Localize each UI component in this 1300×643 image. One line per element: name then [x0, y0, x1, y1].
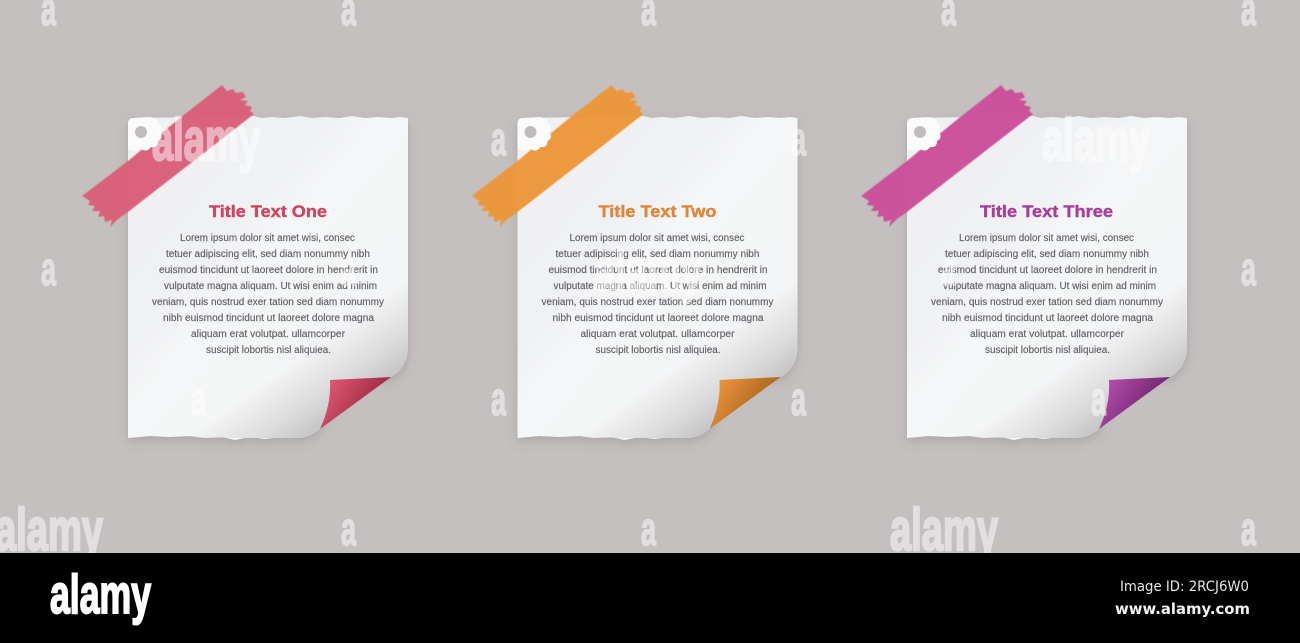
body text three: Lorem ipsum dolor sit amet wisi, consec — [959, 233, 1134, 244]
body text three: tetuer adipiscing elit, sed diam nonummy nibh — [945, 249, 1149, 260]
punched corner three — [907, 117, 941, 151]
page fold two — [710, 377, 780, 429]
page fold one — [320, 377, 391, 429]
body text two: suscipit lobortis nisl aliquiea. — [596, 345, 720, 356]
website: www.alamy.com — [1115, 600, 1250, 618]
tape two — [472, 85, 644, 227]
paper sheet three — [907, 116, 1187, 440]
body text three: euismod tincidunt ut laoreet dolore in hendrerit in — [938, 265, 1157, 276]
watermarks: alamy — [152, 107, 260, 173]
body text one: nibh euismod tincidunt ut laoreet dolore magna — [163, 313, 374, 324]
watermarks: a — [941, 242, 956, 295]
body text two: tetuer adipiscing elit, sed diam nonummy nibh — [556, 249, 760, 260]
body text three: veniam, quis nostrud exer tation sed diam nonummy — [931, 297, 1163, 308]
body text three — [931, 233, 1163, 356]
body text one: aliquam erat volutpat. ullamcorper — [191, 329, 346, 340]
paper sheet one — [128, 116, 408, 440]
paper sheet two — [518, 116, 798, 440]
watermarks: a — [1241, 242, 1256, 295]
body text one: suscipit lobortis nisl aliquiea. — [206, 345, 331, 356]
page curl shading three — [907, 118, 1187, 438]
watermarks: alamy — [890, 497, 998, 563]
body text two: vulputate magna aliquam. Ut wisi enim ad minim — [554, 281, 766, 292]
body text two: aliquam erat volutpat. ullamcorper — [580, 329, 735, 340]
watermarks: a — [341, 502, 356, 555]
tape one — [82, 85, 254, 227]
watermarks: a — [641, 502, 656, 555]
watermarks: alamy — [0, 497, 103, 563]
watermarks: a — [791, 372, 806, 425]
body text one: Lorem ipsum dolor sit amet wisi, consec — [180, 233, 355, 244]
page fold three — [1099, 377, 1170, 429]
body text two: euismod tincidunt ut laoreet dolore in hendrerit in — [548, 265, 768, 276]
title three: Title Text Three — [980, 202, 1113, 221]
body text one: tetuer adipiscing elit, sed diam nonummy nibh — [166, 249, 370, 260]
page curl shading one — [128, 118, 408, 438]
watermarks: a — [491, 372, 506, 425]
body text one: veniam, quis nostrud exer tation sed diam nonummy — [152, 297, 384, 308]
watermarks: alamy — [594, 237, 702, 303]
title two: Title Text Two — [598, 202, 716, 221]
card one — [82, 85, 408, 440]
tape three — [861, 85, 1033, 227]
watermarks: a — [191, 372, 206, 425]
page curl shading two — [518, 118, 798, 438]
title one: Title Text One — [209, 202, 327, 221]
watermarks: a — [491, 112, 506, 165]
watermarks: a — [1091, 372, 1106, 425]
body text two: nibh euismod tincidunt ut laoreet dolore magna — [552, 313, 764, 324]
watermarks: a — [791, 112, 806, 165]
footer bar — [0, 553, 1300, 643]
body text three: aliquam erat volutpat. ullamcorper — [970, 329, 1125, 340]
body text three: nibh euismod tincidunt ut laoreet dolore magna — [942, 313, 1153, 324]
alamy logo: alamy — [50, 563, 151, 625]
body text three: suscipit lobortis nisl aliquiea. — [985, 345, 1110, 356]
body text two: veniam, quis nostrud exer tation sed diam nonummy — [542, 297, 774, 308]
body text one: vulputate magna aliquam. Ut wisi enim ad minim — [164, 281, 377, 292]
card three — [861, 85, 1187, 440]
watermarks: a — [1241, 502, 1256, 555]
watermarks: a — [341, 242, 356, 295]
punched corner two — [518, 117, 551, 151]
watermarks: alamy — [1042, 107, 1150, 173]
card two — [472, 85, 798, 440]
watermarks: a — [41, 242, 56, 295]
body text two — [542, 233, 774, 356]
punched corner one — [128, 117, 162, 151]
body text three: vulputate magna aliquam. Ut wisi enim ad minim — [943, 281, 1156, 292]
body text one — [152, 233, 384, 356]
image id: Image ID: 2RCJ6W0 — [1120, 579, 1249, 595]
body text two: Lorem ipsum dolor sit amet wisi, consec — [570, 233, 744, 244]
body text one: euismod tincidunt ut laoreet dolore in hendrerit in — [159, 265, 378, 276]
